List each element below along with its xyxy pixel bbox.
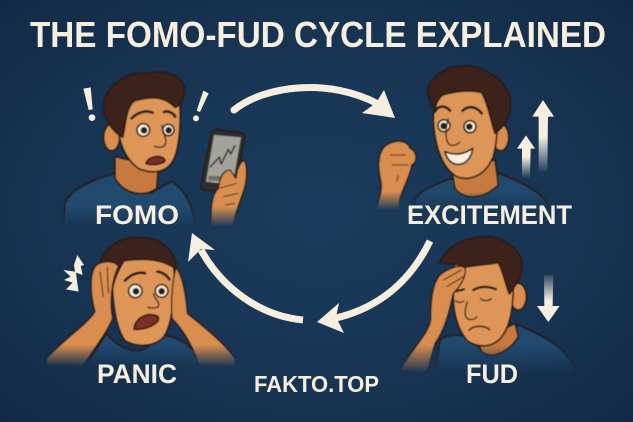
mouth [134, 315, 159, 329]
nose [446, 118, 460, 145]
nose [147, 293, 159, 308]
neck [115, 157, 158, 194]
hair [440, 237, 522, 294]
left arm [47, 262, 118, 373]
ear [493, 124, 509, 151]
exclamation marks [83, 87, 93, 110]
shirt [436, 324, 574, 368]
arrow: FOMO to excitement [234, 88, 395, 118]
brows [125, 272, 169, 281]
watermark: fakto.top: FAKTO.TOP [254, 371, 379, 397]
face [453, 253, 513, 346]
nose [154, 125, 166, 147]
brows [132, 111, 175, 118]
nose [465, 302, 477, 319]
right arm [172, 267, 235, 377]
eyes [455, 298, 492, 302]
arrow: panic to FOMO [188, 233, 303, 320]
arrow: excitement to FUD [317, 241, 430, 333]
person: FOMO [63, 72, 247, 237]
brows [435, 107, 482, 113]
brows [454, 287, 496, 292]
neck [478, 323, 518, 355]
hand [211, 161, 247, 237]
person: FUD [400, 237, 575, 387]
face [118, 98, 182, 174]
shirt [63, 172, 196, 224]
eyes [438, 120, 450, 132]
label: FUD: FUD [466, 359, 518, 389]
shirt [88, 332, 196, 362]
person: excitement [375, 66, 554, 223]
label: panic: PANIC [97, 359, 177, 389]
mouth [146, 156, 165, 165]
ear [104, 124, 120, 151]
hair [104, 72, 184, 137]
mouth [445, 148, 473, 164]
eyes [137, 124, 150, 136]
shirt [414, 172, 548, 206]
face [112, 253, 174, 345]
up arrows [532, 100, 554, 173]
shock mark [63, 255, 84, 292]
mouth [469, 326, 490, 331]
face [433, 80, 497, 178]
down arrow [537, 275, 560, 322]
ear [510, 283, 526, 310]
phone [201, 130, 244, 193]
label: excitement: EXCITEMENT [407, 200, 572, 230]
fist [375, 141, 416, 213]
neck [452, 160, 498, 197]
hair [100, 237, 177, 293]
eyes [129, 284, 142, 298]
hair [428, 66, 511, 133]
hand and arm [400, 266, 465, 373]
person: panic [47, 237, 235, 377]
label: FOMO: FOMO [95, 200, 179, 230]
